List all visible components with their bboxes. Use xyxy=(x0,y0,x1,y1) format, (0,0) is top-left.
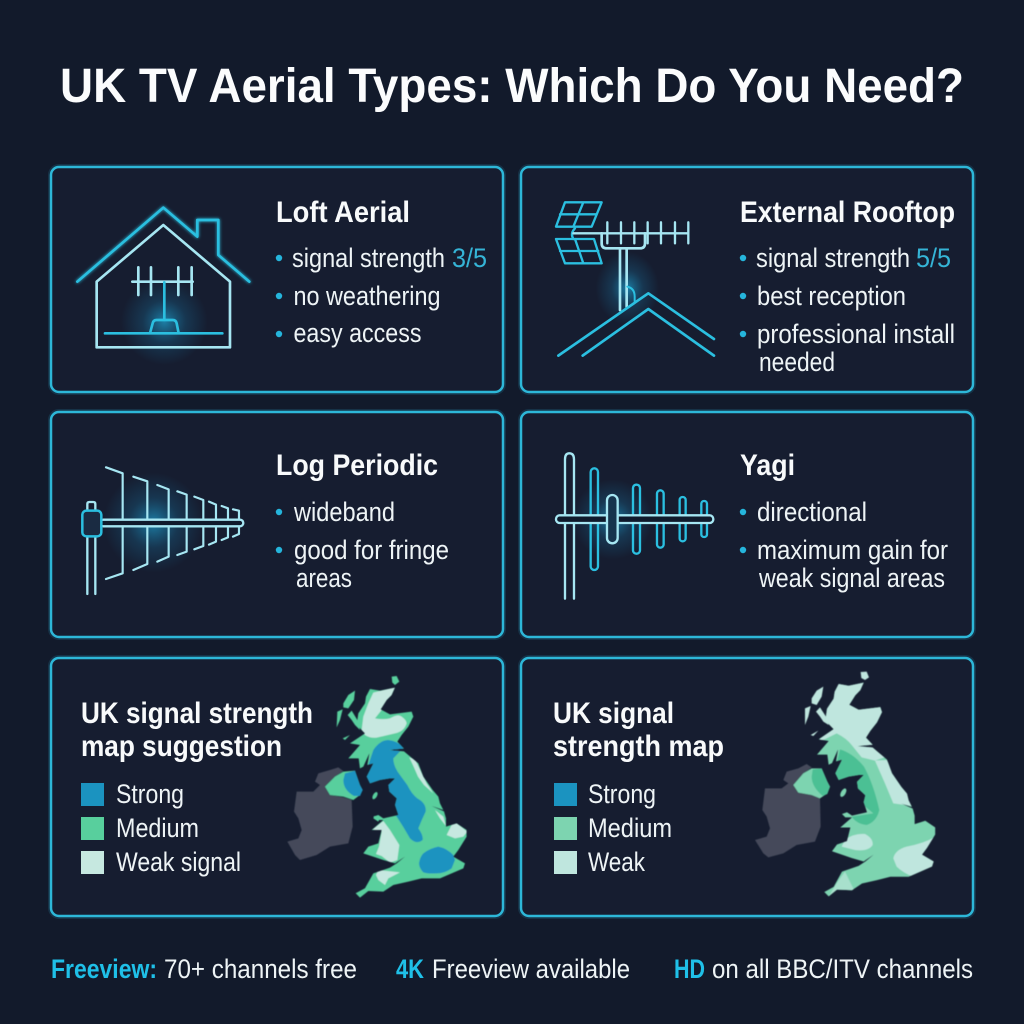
footer: Freeview channels: Freeview: xyxy=(51,954,157,984)
icon: house with loft aerial xyxy=(77,208,249,365)
list: log periodic features: wideband xyxy=(293,497,395,527)
legend: map suggestion xyxy=(81,779,241,877)
heading: loft aerial: Loft Aerial xyxy=(276,196,410,229)
heading: yagi: Yagi xyxy=(740,449,795,482)
list: loft aerial features: no weathering xyxy=(294,281,440,311)
heading: map suggestion xyxy=(81,697,313,763)
list: yagi features xyxy=(740,497,948,593)
panel: UK signal strength map xyxy=(521,658,973,916)
list: rooftop features: professional install xyxy=(757,319,955,349)
panel: UK signal strength map suggestion xyxy=(51,658,503,916)
legend: map suggestion: Weak signal xyxy=(116,847,241,877)
list: log periodic features: good for fringe xyxy=(294,535,449,565)
map: UK signal strength, three zones xyxy=(287,676,473,903)
heading: map suggestion: map suggestion xyxy=(81,730,282,763)
list: rooftop features: signal strength xyxy=(756,243,910,273)
icon: rooftop aerial xyxy=(556,202,714,356)
heading: external rooftop: External Rooftop xyxy=(740,196,955,229)
legend: signal strength map: Strong xyxy=(588,779,656,809)
heading: log periodic: Log Periodic xyxy=(276,449,438,482)
map: UK signal strength, medium and weak zones xyxy=(755,672,943,903)
list: rooftop features: best reception xyxy=(757,281,906,311)
list: rooftop features xyxy=(740,243,955,377)
legend: signal strength map: Weak xyxy=(588,847,645,877)
list: yagi features: directional xyxy=(757,497,867,527)
list: loft aerial features: 3/5 xyxy=(452,243,487,273)
legend: map suggestion: Medium xyxy=(116,813,199,843)
panel: loft aerial xyxy=(51,167,503,392)
heading: signal strength map xyxy=(553,697,724,763)
list: rooftop features: 5/5 xyxy=(916,243,951,273)
footer: HD channels: on all BBC/ITV channels xyxy=(712,954,973,984)
list: loft aerial features: signal strength xyxy=(292,243,445,273)
legend: signal strength map xyxy=(554,779,672,877)
list: log periodic features xyxy=(276,497,449,593)
footer: 4K Freeview: 4K xyxy=(396,954,424,984)
list: rooftop features: needed xyxy=(759,347,835,377)
legend: signal strength map: Medium xyxy=(588,813,672,843)
list: loft aerial features xyxy=(276,243,487,348)
panel: yagi xyxy=(521,412,973,637)
list: log periodic features: areas xyxy=(296,563,352,593)
footer: HD channels: HD xyxy=(674,954,705,984)
list: yagi features: weak signal areas xyxy=(758,563,945,593)
footer: Freeview channels xyxy=(51,954,357,984)
panel: log periodic xyxy=(51,412,503,637)
panel: external rooftop xyxy=(521,167,973,392)
footer: Freeview channels: 70+ channels free xyxy=(164,954,357,984)
icon: yagi aerial xyxy=(556,453,713,599)
heading: signal strength map: strength map xyxy=(553,730,724,763)
heading: map suggestion: UK signal strength xyxy=(81,697,313,730)
footer: 4K Freeview: Freeview available xyxy=(432,954,630,984)
heading: signal strength map: UK signal xyxy=(553,697,674,730)
icon: log periodic aerial xyxy=(82,467,243,594)
list: loft aerial features: easy access xyxy=(294,318,422,348)
list: yagi features: maximum gain for xyxy=(757,535,948,565)
title: UK TV Aerial Types: Which Do You Need? xyxy=(60,60,964,113)
legend: map suggestion: Strong xyxy=(116,779,184,809)
